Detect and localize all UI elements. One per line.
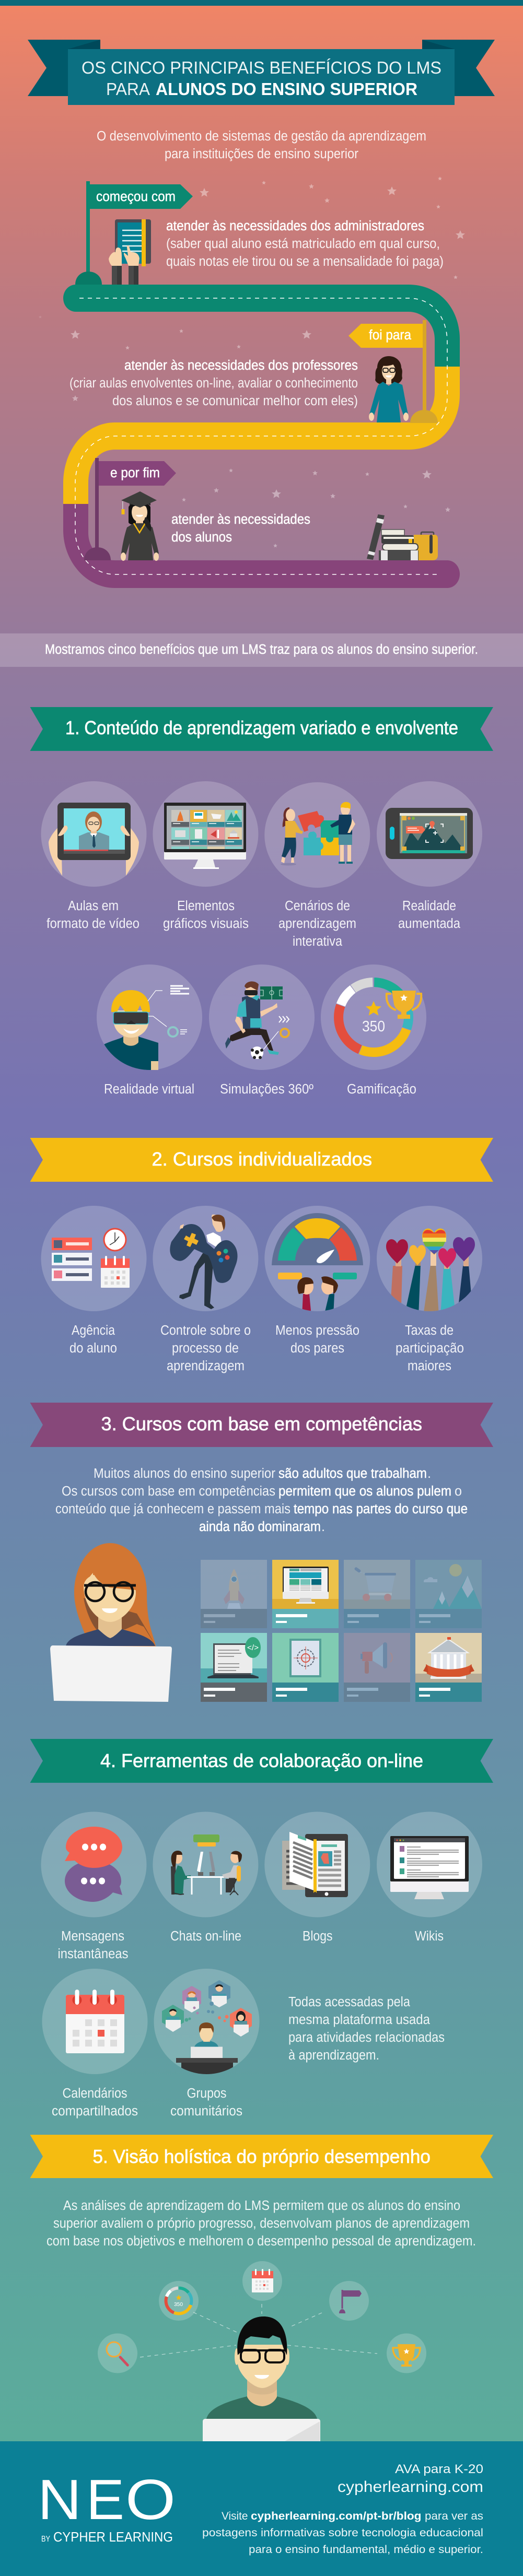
label: Grupos <box>187 2086 227 2101</box>
text: professores: dos alunos e se comunicar melhor com eles) <box>112 394 358 408</box>
label <box>160 1323 251 1373</box>
label: Aulas em <box>68 899 119 913</box>
icon: visual graphics monitor <box>153 781 258 887</box>
text: alunos: dos alunos <box>171 530 232 545</box>
icon: magnifier <box>98 2333 137 2373</box>
heading: section 1 <box>30 707 493 751</box>
label: aprendizagem <box>278 916 356 931</box>
label: Simulações 360º <box>220 1082 313 1097</box>
tile: monitor <box>272 1560 339 1628</box>
icon: community groups <box>154 1969 259 2081</box>
label: interativa <box>293 934 343 949</box>
label: Realidade virtual <box>104 1082 194 1097</box>
label: Mensagens <box>61 1929 124 1944</box>
text: competências paragraph: Muitos alunos do ensino superior <box>94 1466 275 1481</box>
logo: NEO by CYPHER LEARNING: BY <box>41 2535 50 2544</box>
heading: section 5: 5. Visão holística do próprio desempenho <box>93 2146 431 2167</box>
heading: section 2 <box>30 1138 493 1182</box>
logo: NEO by CYPHER LEARNING: O <box>125 2468 176 2532</box>
tile: shopping cart <box>344 1560 410 1628</box>
flag: e por fim <box>84 458 176 560</box>
text: competências paragraph: ainda não dominaram <box>199 1520 321 1534</box>
text: administradores: (saber qual aluno está matriculado em qual curso, <box>166 237 440 251</box>
icon: wiki monitor <box>377 1812 482 1918</box>
section 5 <box>30 2135 493 2441</box>
label: Menos pressão <box>275 1323 359 1338</box>
label: Controle sobre o <box>160 1323 251 1338</box>
label <box>398 899 461 931</box>
icon: game controller person <box>153 1206 258 1311</box>
icon: blog tablet and book <box>264 1812 370 1918</box>
label: Gamificação <box>347 1082 416 1097</box>
section 4 <box>30 1739 493 2119</box>
icon: books and bag <box>367 514 438 560</box>
icon: instant message bubbles <box>41 1812 146 1918</box>
section 1 <box>30 707 493 1097</box>
text: análises paragraph: As análises de aprendizagem do LMS permitem que os alunos do ensino <box>63 2198 460 2213</box>
text: análises paragraph <box>47 2198 476 2249</box>
flag: foi para <box>348 320 438 423</box>
tile: campus building <box>415 1633 482 1702</box>
label: instantâneas <box>57 1947 129 1961</box>
text: administradores <box>166 219 444 269</box>
heading: section 5 <box>30 2135 493 2178</box>
label: dos pares <box>290 1341 344 1356</box>
logo: NEO by CYPHER LEARNING: E <box>86 2468 124 2532</box>
text: footer contact <box>202 2462 483 2556</box>
label: comunitários <box>170 2104 242 2119</box>
intro text <box>97 129 426 161</box>
flag: foi para: foi para <box>369 328 412 343</box>
icon: teacher <box>369 356 409 422</box>
text: acessadas pela mesma plataforma: para atividades relacionadas <box>288 2030 445 2045</box>
label: Realidade <box>402 899 456 913</box>
panel: course tiles <box>201 1560 482 1702</box>
dashed connectors <box>140 2304 377 2357</box>
icon: man at laptop <box>203 2316 320 2441</box>
text: análises paragraph: superior avaliem o próprio progresso, desenvolvam planos de aprendizagem <box>53 2216 470 2231</box>
heading: section 2: 2. Cursos individualizados <box>152 1148 372 1170</box>
text: acessadas pela mesma plataforma: mesma plataforma usada <box>288 2013 431 2027</box>
icon: mini calendar <box>242 2261 282 2301</box>
label: Calendários <box>63 2086 127 2101</box>
section 2 <box>30 1138 493 1373</box>
label: gráficos visuais <box>163 916 249 931</box>
label <box>170 2086 242 2119</box>
label <box>69 1323 117 1356</box>
text: footer contact: cypherlearning.com/pt-br/blog <box>251 2510 421 2522</box>
icon: hands raising hearts <box>377 1206 482 1316</box>
label: Cenários de <box>285 899 350 913</box>
label <box>47 899 140 931</box>
banner text: Mostramos cinco benefícios que um LMS traz para os alunos do ensino superior. <box>45 642 478 657</box>
label: Wikis <box>415 1929 444 1944</box>
icon: gamification donut <box>321 964 426 1070</box>
heading: section 4 <box>30 1739 493 1783</box>
text: competências paragraph: . <box>321 1520 325 1534</box>
decorative stars <box>39 177 465 547</box>
text: alunos: atender às necessidades <box>171 512 310 527</box>
icon: puzzle team <box>264 782 370 888</box>
icon: gamification donut: 350 <box>362 1018 385 1035</box>
title ribbon <box>28 40 495 105</box>
text: acessadas pela mesma plataforma <box>288 1995 445 2063</box>
heading: section 1: 1. Conteúdo de aprendizagem variado e envolvente <box>65 717 458 738</box>
heading: section 3 <box>30 1403 493 1447</box>
text: acessadas pela mesma plataforma: Todas acessadas pela <box>288 1995 411 2009</box>
label <box>278 899 356 949</box>
label: Agência <box>72 1323 115 1338</box>
icon: augmented reality phone <box>377 781 482 887</box>
intro text: O desenvolvimento de sistemas de gestão da aprendizagem <box>97 129 426 144</box>
tile: code laptop <box>201 1633 267 1702</box>
label <box>396 1323 464 1373</box>
label: maiores <box>408 1359 451 1373</box>
icon: online chat desks <box>153 1812 258 1918</box>
label: processo de <box>172 1341 239 1356</box>
label: compartilhados <box>52 2104 138 2119</box>
text: competências paragraph: conteúdo que já conhecem e passem mais <box>55 1502 290 1516</box>
logo: NEO by CYPHER LEARNING <box>38 2468 176 2545</box>
label <box>57 1929 129 1961</box>
icon: peer pressure gauge <box>264 1206 370 1316</box>
text: footer contact: Visite <box>222 2510 248 2522</box>
text: competências paragraph: o <box>455 1484 462 1499</box>
icon: graduate <box>121 491 159 561</box>
text: competências paragraph <box>55 1466 468 1534</box>
text: administradores: atender às necessidades dos administradores <box>166 219 424 233</box>
icon: woman at laptop <box>50 1543 172 1702</box>
text: acessadas pela mesma plataforma: à aprendizagem. <box>288 2048 379 2063</box>
icon: flag <box>329 2281 369 2321</box>
icon: hands holding tablet <box>109 219 151 285</box>
icon: student agency <box>41 1206 146 1311</box>
text: competências paragraph: Os cursos com base em competências <box>62 1484 275 1499</box>
text: footer contact: AVA para K-20 <box>395 2462 483 2476</box>
icon: virtual reality user <box>97 964 202 1070</box>
text: alunos <box>171 512 310 545</box>
label: Chats on-line <box>170 1929 241 1944</box>
flag: começou com: começou com <box>96 190 176 204</box>
panel: footer <box>0 2441 523 2576</box>
text: footer contact: para o ensino fundamental, médio e superior. <box>249 2544 483 2556</box>
icon: trophy <box>387 991 421 1019</box>
tile: megaphone <box>344 1633 410 1702</box>
text: competências paragraph: . <box>427 1466 431 1481</box>
title ribbon: PARA <box>106 79 150 99</box>
text: footer contact: cypherlearning.com <box>338 2478 483 2496</box>
text: administradores: quais notas ele tirou ou se a mensalidade foi paga) <box>166 254 444 269</box>
title ribbon: OS CINCO PRINCIPAIS BENEFÍCIOS DO LMS <box>82 58 441 77</box>
icon: mini trophy <box>387 2333 426 2373</box>
tile: rocket <box>201 1560 267 1628</box>
label: formato de vídeo <box>47 916 140 931</box>
label: participação <box>396 1341 464 1356</box>
icon: video lesson tablet <box>41 781 146 887</box>
logo: NEO by CYPHER LEARNING: CYPHER LEARNING <box>53 2529 173 2545</box>
label: aprendizagem <box>167 1359 245 1373</box>
text: competências paragraph: tempo nas partes do curso que <box>294 1502 468 1516</box>
label <box>52 2086 138 2119</box>
title ribbon: ALUNOS DO ENSINO SUPERIOR <box>156 79 417 99</box>
text: competências paragraph: são adultos que trabalham <box>278 1466 427 1481</box>
section 3 <box>30 1403 493 1702</box>
label <box>163 899 249 931</box>
heading: section 3: 3. Cursos com base em competências <box>101 1413 422 1434</box>
text: competências paragraph: permitem que os alunos pulem <box>278 1484 451 1499</box>
flag: e por fim: e por fim <box>110 466 160 480</box>
label: aumentada <box>398 916 461 931</box>
icon: mini donut: 350 <box>174 2302 183 2308</box>
icon: soccer simulation <box>209 964 315 1070</box>
text: footer contact: para ver as <box>425 2510 483 2522</box>
icon: mini donut <box>159 2281 199 2321</box>
label <box>275 1323 359 1356</box>
text: professores: atender às necessidades dos professores <box>124 358 358 373</box>
label: Elementos <box>177 899 235 913</box>
text: análises paragraph: com base nos objetivos e melhorem o desempenho pessoal de aprendizagem. <box>47 2234 476 2249</box>
tile: blueprint <box>272 1633 339 1702</box>
banner text <box>0 633 523 667</box>
logo: NEO by CYPHER LEARNING: N <box>38 2468 82 2532</box>
flag: começou com <box>75 181 193 285</box>
text: professores: (criar aulas envolventes on-line, avaliar o conhecimento <box>69 376 358 391</box>
tile: mountains <box>415 1560 482 1628</box>
label: do aluno <box>69 1341 117 1356</box>
label: Blogs <box>303 1929 332 1944</box>
label: Taxas de <box>405 1323 454 1338</box>
winding road <box>63 285 460 588</box>
icon: shared calendar <box>42 1969 147 2074</box>
tile: code laptop: </> <box>247 1643 259 1652</box>
intro text: para instituições de ensino superior <box>165 147 358 161</box>
text: professores <box>69 358 358 408</box>
heading: section 4: 4. Ferramentas de colaboração on-line <box>100 1750 423 1771</box>
text: footer contact: postagens informativas sobre tecnologia educacional <box>202 2527 483 2539</box>
